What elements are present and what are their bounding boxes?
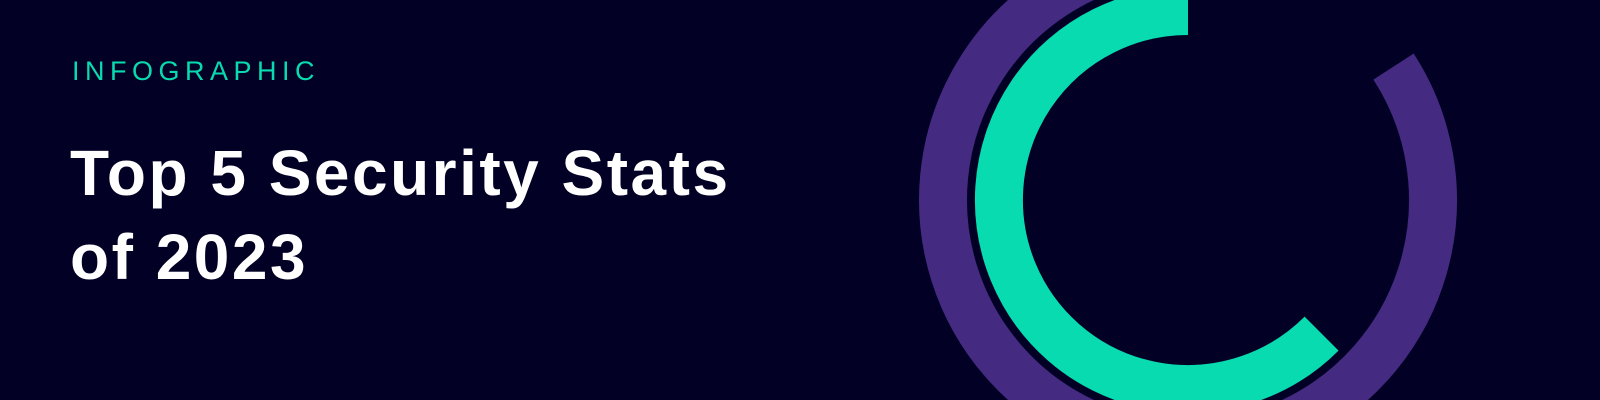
kicker label: INFOGRAPHIC xyxy=(72,56,320,86)
title xyxy=(70,137,731,293)
arc: purple outer ring xyxy=(943,0,1433,400)
title: of 2023 xyxy=(70,221,308,293)
title: Top 5 Security Stats xyxy=(70,137,731,209)
arc: green inner ring xyxy=(999,11,1322,389)
